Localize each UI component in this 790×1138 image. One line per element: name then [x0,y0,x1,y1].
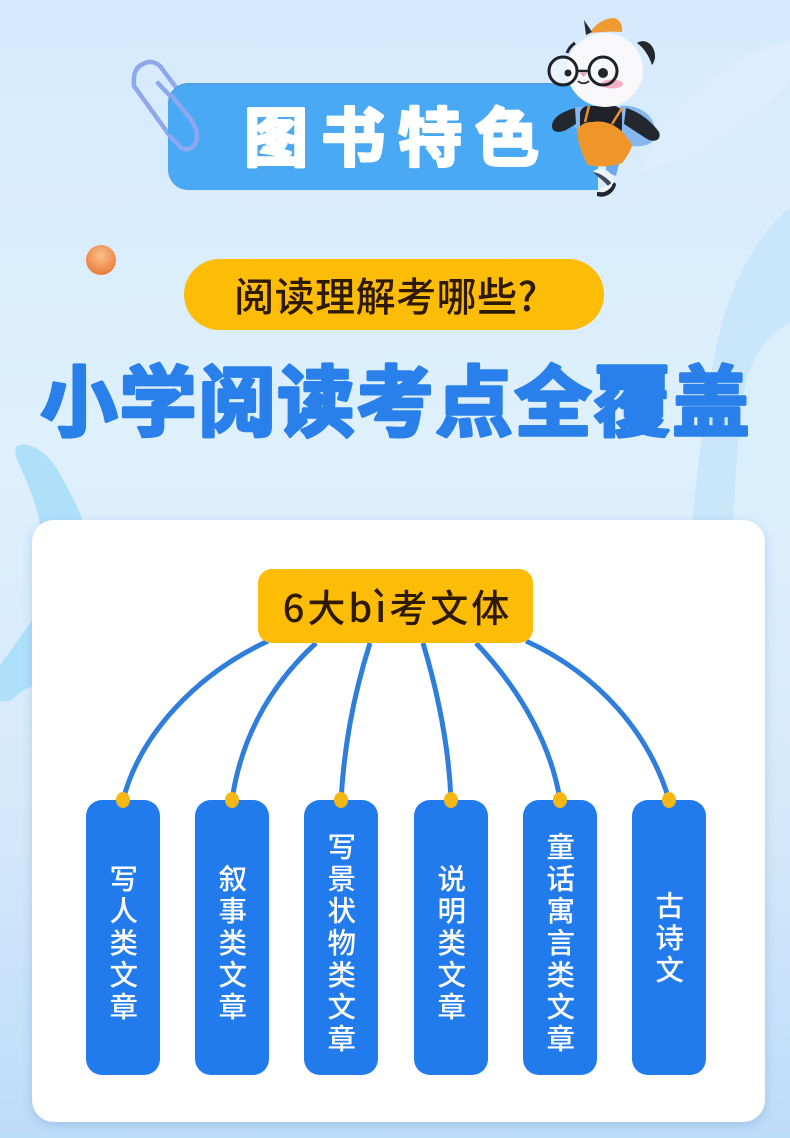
bar: 童话寓言类文章: 童话寓言类文章 [540,832,581,1056]
panda mascot [548,18,660,197]
paperclip icon [132,60,178,137]
cheek [601,80,623,88]
head [567,33,643,107]
header box: 6大bì考文体 [258,569,533,643]
glasses [549,57,577,85]
bar: 写景状物类文章: 写景状物类文章 [321,832,362,1056]
main title: 小学阅读考点全覆盖 [40,342,752,453]
arms [552,108,576,132]
banner: 图书特色: 图书特色 [244,88,552,180]
bar: 写人类文章 [86,800,160,1075]
header box: 6大bì考文体: 6大bì考文体 [283,578,512,633]
ear [637,41,655,65]
backpack [620,106,655,146]
decorative orange ball [86,245,116,275]
subtitle pill [184,259,604,330]
orange overalls [577,122,632,166]
torso [580,106,622,136]
bar: 叙事类文章 [195,800,269,1075]
bar: 写景状物类文章 [304,800,378,1075]
banner: 图书特色 [168,83,598,190]
bar: 古诗文: 古诗文 [649,891,690,987]
subtitle pill: 阅读理解考哪些? [234,265,538,323]
connector dots [116,792,676,808]
bar: 古诗文 [632,800,706,1075]
bar: 说明类文章 [414,800,488,1075]
bar: 童话寓言类文章 [523,800,597,1075]
bar: 写人类文章: 写人类文章 [103,864,144,1024]
legs and shoes [606,160,620,176]
bar: 叙事类文章: 叙事类文章 [212,864,253,1024]
eyes, nose, mouth [564,70,572,76]
hat [590,18,622,33]
bar: 说明类文章: 说明类文章 [431,864,472,1024]
white content card [32,520,765,1122]
